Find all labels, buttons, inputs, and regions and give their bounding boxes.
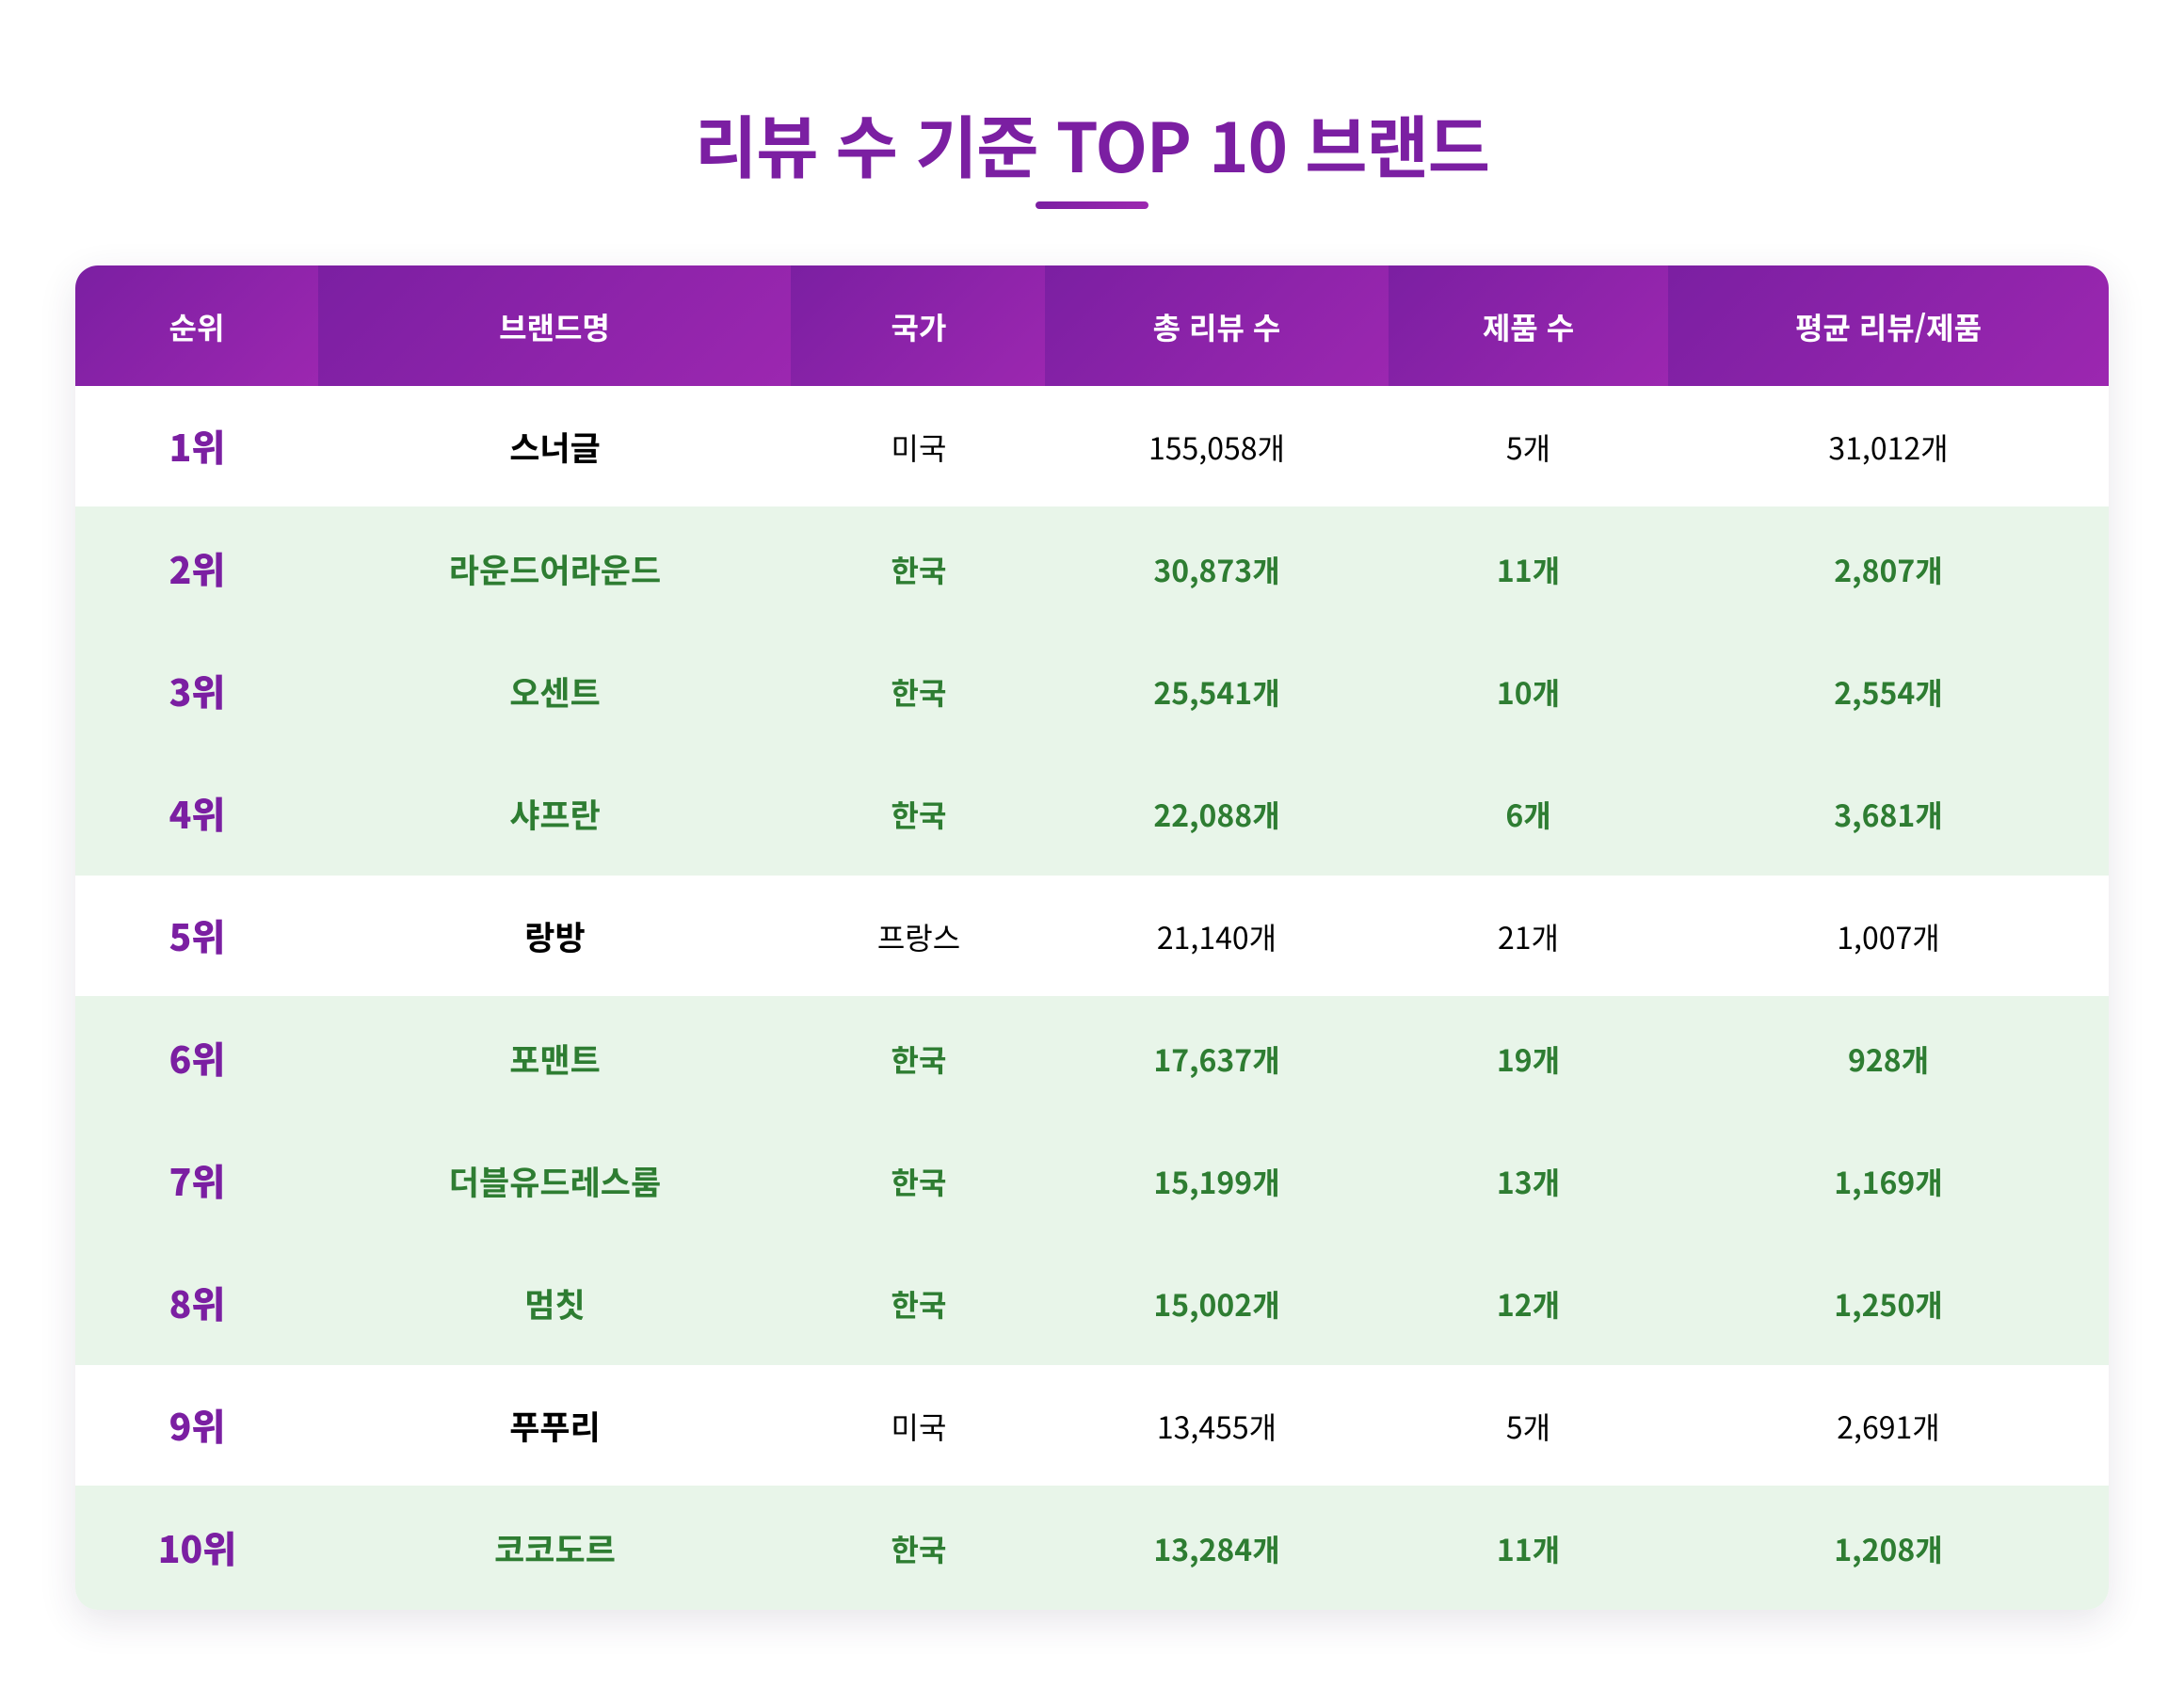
row: rank 4 샤프란: 6개 xyxy=(1505,793,1551,836)
table header row: 평균 리뷰/제품 xyxy=(1795,305,1982,348)
table header row: 브랜드명 xyxy=(499,305,610,348)
row: rank 1 스너글: 스너글 xyxy=(509,422,601,471)
row: rank 2 라운드어라운드: 라운드어라운드 xyxy=(449,544,661,593)
row: rank 5 랑방: 프랑스 xyxy=(877,915,960,958)
row: rank 10 코코도르: 11개 xyxy=(1497,1527,1560,1570)
row: rank 9 푸푸리 xyxy=(169,1399,1940,1452)
row: rank 3 오센트: 2,554개 xyxy=(1834,670,1943,714)
row: rank 8 멈칫: 8위 xyxy=(169,1277,225,1329)
row: rank 4 샤프란: 3,681개 xyxy=(1834,793,1943,836)
row: rank 10 코코도르: 코코도르 xyxy=(494,1523,616,1572)
row: rank 2 라운드어라운드: 30,873개 xyxy=(1153,548,1280,591)
row: rank 5 랑방: 랑방 xyxy=(524,911,586,960)
row: rank 2 라운드어라운드: 2,807개 xyxy=(1834,548,1943,591)
table header row xyxy=(75,265,2109,386)
row: rank 6 포맨트: 한국 xyxy=(891,1037,946,1081)
row: rank 6 포맨트: 포맨트 xyxy=(509,1034,601,1083)
table header row: 순위 xyxy=(169,305,224,348)
row: rank 1 스너글: 미국 xyxy=(891,426,946,469)
row: rank 2 라운드어라운드 xyxy=(75,506,2109,631)
row: rank 4 샤프란: 22,088개 xyxy=(1153,793,1280,836)
row: rank 6 포맨트: 17,637개 xyxy=(1153,1037,1280,1081)
title underline xyxy=(1036,201,1148,209)
row: rank 1 스너글: 31,012개 xyxy=(1828,426,1949,469)
row: rank 7 더블유드레스룸: 15,199개 xyxy=(1153,1160,1280,1203)
row: rank 7 더블유드레스룸: 13개 xyxy=(1497,1160,1560,1203)
row: rank 7 더블유드레스룸: 더블유드레스룸 xyxy=(449,1156,661,1205)
row: rank 7 더블유드레스룸 xyxy=(75,1120,2109,1243)
row: rank 10 코코도르: 10위 xyxy=(158,1521,236,1574)
row: rank 4 샤프란 xyxy=(75,753,2109,876)
row: rank 3 오센트: 오센트 xyxy=(509,667,601,715)
row: rank 8 멈칫: 15,002개 xyxy=(1153,1282,1280,1326)
row: rank 1 스너글: 1위 xyxy=(169,420,225,473)
row: rank 8 멈칫: 1,250개 xyxy=(1834,1282,1943,1326)
row: rank 5 랑방: 21개 xyxy=(1498,915,1559,958)
row: rank 4 샤프란: 4위 xyxy=(169,787,225,840)
row: rank 4 샤프란: 한국 xyxy=(891,793,946,836)
row: rank 9 푸푸리: 푸푸리 xyxy=(509,1401,601,1450)
row: rank 10 코코도르 xyxy=(75,1486,2109,1610)
row: rank 9 푸푸리: 13,455개 xyxy=(1157,1405,1277,1448)
row: rank 6 포맨트: 19개 xyxy=(1497,1037,1560,1081)
row: rank 10 코코도르: 한국 xyxy=(891,1527,946,1570)
row: rank 3 오센트: 10개 xyxy=(1497,670,1560,714)
row: rank 8 멈칫: 멈칫 xyxy=(524,1278,586,1327)
table header row: 제품 수 xyxy=(1483,305,1574,348)
row: rank 7 더블유드레스룸: 1,169개 xyxy=(1834,1160,1943,1203)
row: rank 5 랑방: 1,007개 xyxy=(1837,915,1940,958)
panel: ranking table xyxy=(75,265,2109,1610)
row: rank 5 랑방 xyxy=(169,909,1940,962)
row: rank 6 포맨트: 928개 xyxy=(1848,1037,1929,1081)
row: rank 5 랑방: 5위 xyxy=(169,909,225,962)
row: rank 7 더블유드레스룸: 7위 xyxy=(169,1154,225,1207)
row: rank 3 오센트: 3위 xyxy=(169,665,225,717)
row: rank 9 푸푸리: 5개 xyxy=(1506,1405,1550,1448)
row: rank 8 멈칫: 한국 xyxy=(891,1282,946,1326)
row: rank 3 오센트: 25,541개 xyxy=(1153,670,1280,714)
row: rank 4 샤프란: 샤프란 xyxy=(509,789,601,838)
row: rank 10 코코도르: 13,284개 xyxy=(1153,1527,1280,1570)
row: rank 10 코코도르: 1,208개 xyxy=(1834,1527,1943,1570)
row: rank 6 포맨트: 6위 xyxy=(169,1032,225,1085)
row: rank 9 푸푸리: 9위 xyxy=(169,1399,225,1452)
row: rank 9 푸푸리: 2,691개 xyxy=(1837,1405,1940,1448)
row: rank 7 더블유드레스룸: 한국 xyxy=(891,1160,946,1203)
table header row: 총 리뷰 수 xyxy=(1153,305,1280,348)
row: rank 6 포맨트 xyxy=(75,996,2109,1120)
row: rank 2 라운드어라운드: 11개 xyxy=(1497,548,1560,591)
row: rank 3 오센트: 한국 xyxy=(891,670,946,714)
row: rank 1 스너글 xyxy=(169,420,1949,473)
row: rank 2 라운드어라운드: 2위 xyxy=(169,542,225,595)
row: rank 9 푸푸리: 미국 xyxy=(891,1405,946,1448)
row: rank 8 멈칫: 12개 xyxy=(1497,1282,1560,1326)
table header row: 국가 xyxy=(891,305,946,348)
row: rank 8 멈칫 xyxy=(75,1243,2109,1365)
row: rank 1 스너글: 155,058개 xyxy=(1148,426,1285,469)
row: rank 2 라운드어라운드: 한국 xyxy=(891,548,946,591)
row: rank 5 랑방: 21,140개 xyxy=(1157,915,1277,958)
row: rank 3 오센트 xyxy=(75,631,2109,753)
title: 리뷰 수 기준 TOP 10 브랜드 xyxy=(695,93,1489,192)
row: rank 1 스너글: 5개 xyxy=(1506,426,1550,469)
